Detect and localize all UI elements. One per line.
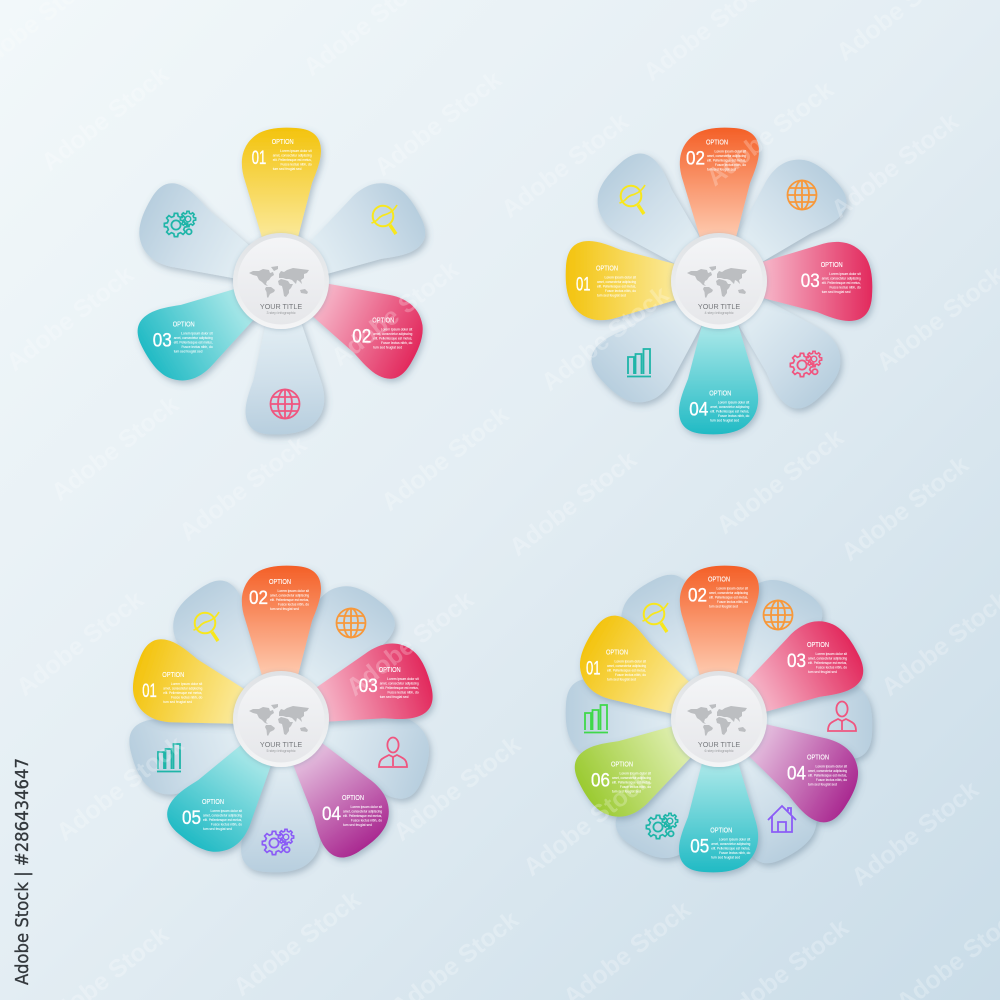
petal: search (grey) <box>583 144 719 280</box>
text: option 03: tum sed feugiat sed <box>822 290 851 294</box>
text: option 02: Lorem ipsum dolor sit <box>381 328 412 332</box>
text: option 01: Lorem ipsum dolor sit <box>171 682 202 686</box>
text: option 02: OPTION <box>372 318 394 325</box>
text: option 03: tum sed feugiat sed <box>808 670 837 674</box>
text: option 03 <box>359 667 419 699</box>
center circle <box>671 233 767 329</box>
petal: search (grey) <box>296 170 434 296</box>
text: option 04: 04 <box>322 803 341 825</box>
text: option 02 <box>249 579 309 611</box>
icon: gears <box>164 211 196 237</box>
text: option 04: amet, consectetur adipiscing <box>808 769 847 773</box>
text: option 01: elit. Pellentesque est metus, <box>597 285 636 289</box>
text: option 03: elit. Pellentesque est metus, <box>808 661 847 665</box>
text: option 05: elit. Pellentesque est metus, <box>203 818 242 822</box>
center circle: 6 step infographic <box>704 749 734 753</box>
text: option 01: Lorem ipsum dolor sit <box>280 149 312 153</box>
petal: house (grey) <box>704 734 830 872</box>
text: option 03: elit. Pellentesque est metus, <box>380 686 419 690</box>
text: option 04: Fusce lectus nibh, do <box>351 818 382 822</box>
petal: chart (grey) <box>566 679 679 758</box>
petal: globe (grey) <box>242 320 325 436</box>
text: option 04: tum sed feugiat sed <box>808 783 837 787</box>
text: option 03: OPTION <box>379 667 401 674</box>
text: option 01: Fusce lectus nibh, do <box>605 289 636 293</box>
text: option 01: 01 <box>586 657 600 679</box>
petal: globe (grey) <box>705 567 830 704</box>
watermark pattern: Adobe Stock <box>846 776 984 892</box>
center circle: 5 step infographic <box>266 749 296 753</box>
text: option 01: tum sed feugiat sed <box>597 294 626 298</box>
text: option 04: amet, consectetur adipiscing <box>343 810 382 814</box>
text: option 03: OPTION <box>173 322 195 329</box>
text: option 03: 03 <box>787 650 806 672</box>
center circle: 4 step infographic <box>704 311 734 315</box>
text: option 02: elit. Pellentesque est metus, <box>709 595 748 599</box>
text: option 03: Lorem ipsum dolor sit <box>829 272 861 276</box>
text: option 05: OPTION <box>202 799 224 806</box>
petal: option 01 <box>566 241 679 320</box>
text: option 04: Lorem ipsum dolor sit <box>815 765 847 769</box>
text: option 01 <box>586 649 646 681</box>
text: option 03: Fusce lectus nibh, do <box>182 345 213 349</box>
text: option 02: amet, consectetur adipiscing <box>709 591 748 595</box>
petal: option 02 <box>680 128 759 241</box>
text: option 02: amet, consectetur adipiscing <box>707 154 746 158</box>
text: option 03 <box>153 322 213 354</box>
icon: bar chart <box>584 705 608 732</box>
text: option 01: Lorem ipsum dolor sit <box>614 659 646 663</box>
text: option 04: OPTION <box>709 391 731 398</box>
petal: option 03 <box>759 242 872 321</box>
text: option 01: elit. Pellentesque est metus, <box>163 691 202 695</box>
petal: person (grey) <box>307 694 439 804</box>
watermark pattern: Adobe Stock <box>341 586 479 702</box>
text: option 05: tum sed feugiat sed <box>711 855 740 859</box>
watermark pattern: Adobe Stock <box>701 76 839 192</box>
icon: person <box>828 702 856 731</box>
text: option 03: amet, consectetur adipiscing <box>174 336 213 340</box>
watermark pattern: Adobe Stock <box>11 586 149 702</box>
text: option 01: amet, consectetur adipiscing <box>607 664 646 668</box>
text: option 02: 02 <box>686 147 705 169</box>
petal: search (grey) <box>608 566 734 704</box>
text: option 02: amet, consectetur adipiscing <box>270 594 309 598</box>
watermark pattern: Adobe Stock <box>1 261 139 377</box>
text: option 06: tum sed feugiat sed <box>612 790 641 794</box>
text: option 02: elit. Pellentesque est metus, <box>270 598 309 602</box>
text: option 01: tum sed feugiat sed <box>163 700 192 704</box>
text: option 02: elit. Pellentesque est metus, <box>707 158 746 162</box>
petal: option 02 <box>242 566 321 679</box>
text: option 03 <box>801 262 861 294</box>
text: option 02: Lorem ipsum dolor sit <box>714 149 746 153</box>
icon: house <box>768 806 796 832</box>
watermark pattern: Adobe Stock <box>174 431 312 547</box>
text: option 01: OPTION <box>162 672 184 679</box>
text: option 03: elit. Pellentesque est metus, <box>822 281 861 285</box>
center circle: YOUR TITLE <box>698 740 740 749</box>
text: option 06: Fusce lectus nibh, do <box>620 785 651 789</box>
text: option 05: Lorem ipsum dolor sit <box>210 809 242 813</box>
text: option 01: Fusce lectus nibh, do <box>615 673 646 677</box>
text: option 04: OPTION <box>342 795 364 802</box>
petal: option 01 <box>567 608 704 733</box>
text: option 05: amet, consectetur adipiscing <box>711 842 750 846</box>
text: option 05: Fusce lectus nibh, do <box>719 851 750 855</box>
text: option 02: tum sed feugiat sed <box>709 604 738 608</box>
text: option 03: Fusce lectus nibh, do <box>830 286 861 290</box>
watermark pattern: Adobe Stock <box>518 766 656 882</box>
center circle <box>233 671 329 767</box>
icon: search <box>642 603 668 632</box>
icon: search <box>620 185 645 214</box>
text: option 06: 06 <box>591 770 610 792</box>
petal: option 06 <box>566 704 704 830</box>
text: option 02: OPTION <box>708 576 730 583</box>
icon: gears <box>790 351 822 377</box>
center circle <box>233 233 329 329</box>
text: option 02: 02 <box>352 326 371 348</box>
text: option 01: elit. Pellentesque est metus, <box>607 668 646 672</box>
petal: chart (grey) <box>123 693 255 804</box>
watermark pattern: Adobe Stock <box>388 731 526 847</box>
text: option 02: Lorem ipsum dolor sit <box>716 586 748 590</box>
icon: bar chart <box>157 744 181 772</box>
watermark pattern: Adobe Stock <box>711 424 849 540</box>
text: option 04: elit. Pellentesque est metus, <box>808 774 847 778</box>
text: option 03: 03 <box>359 675 378 697</box>
petal: option 04 <box>272 728 403 867</box>
text: option 03: 03 <box>153 330 172 352</box>
text: option 03: OPTION <box>807 642 829 649</box>
center circle: YOUR TITLE <box>260 740 302 749</box>
text: option 01 <box>576 266 636 298</box>
text: option 01: tum sed feugiat sed <box>273 167 302 171</box>
petal: person (grey) <box>759 680 872 759</box>
text: option 02 <box>352 318 412 350</box>
text: option 03: amet, consectetur adipiscing <box>380 682 419 686</box>
petal: globe (grey) <box>720 145 856 281</box>
text: option 02: tum sed feugiat sed <box>707 167 736 171</box>
text: option 06 <box>591 762 651 794</box>
text: option 03: Fusce lectus nibh, do <box>388 690 419 694</box>
petal: option 01 <box>242 128 321 241</box>
text: option 03: OPTION <box>821 262 843 269</box>
text: option 05: amet, consectetur adipiscing <box>203 814 242 818</box>
text: option 03: Lorem ipsum dolor sit <box>815 652 847 656</box>
petal: option 03 <box>307 634 439 745</box>
text: option 04 <box>322 795 382 827</box>
text: option 05: Lorem ipsum dolor sit <box>719 837 750 841</box>
text: option 02: tum sed feugiat sed <box>373 346 402 350</box>
text: option 05 <box>182 799 242 831</box>
watermark pattern: Adobe Stock <box>46 391 184 507</box>
text: option 02: Fusce lectus nibh, do <box>717 600 748 604</box>
text: option 03: Fusce lectus nibh, do <box>816 666 847 670</box>
text: option 02: amet, consectetur adipiscing <box>373 332 412 336</box>
text: option 01: 01 <box>252 147 266 169</box>
text: option 03: amet, consectetur adipiscing <box>822 276 861 280</box>
text: option 01: OPTION <box>606 649 628 656</box>
watermark pattern: Adobe Stock <box>51 731 189 847</box>
petal: gears (grey) <box>608 734 733 871</box>
text: option 02 <box>688 576 748 608</box>
text: option 01: Fusce lectus nibh, do <box>281 162 312 166</box>
text: option 05: 05 <box>690 835 709 857</box>
petal: option 03 <box>129 267 267 394</box>
petal: option 04 <box>734 705 871 830</box>
text: option 02: 02 <box>249 587 268 609</box>
text: option 03: Lorem ipsum dolor sit <box>181 332 213 336</box>
text: option 03: elit. Pellentesque est metus, <box>174 341 213 345</box>
icon: person <box>379 738 407 767</box>
text: option 05: elit. Pellentesque est metus, <box>711 846 750 850</box>
text: option 04 <box>787 755 847 787</box>
diagram: 5 step flower <box>123 566 439 872</box>
text: option 04: 04 <box>689 399 708 421</box>
watermark pattern: Adobe Stock <box>376 401 514 517</box>
center circle: YOUR TITLE <box>260 302 302 311</box>
petal: option 05 <box>159 728 289 866</box>
watermark pattern: Adobe Stock <box>369 66 507 182</box>
petal: option 04 <box>679 321 758 434</box>
text: option 01 <box>142 672 202 704</box>
icon: gears <box>646 813 678 839</box>
text: option 06: amet, consectetur adipiscing <box>612 776 651 780</box>
text: option 04 <box>689 391 749 423</box>
center circle <box>671 671 767 767</box>
text: option 03: tum sed feugiat sed <box>174 350 203 354</box>
text: option 05 <box>690 827 750 859</box>
text: option 02: Fusce lectus nibh, do <box>278 602 309 606</box>
text: option 06: OPTION <box>611 762 633 769</box>
text: option 04: 04 <box>787 763 806 785</box>
text: option 01: amet, consectetur adipiscing <box>163 686 202 690</box>
diagram: 6 step flower <box>566 566 872 872</box>
center circle: YOUR TITLE <box>698 302 740 311</box>
icon: search <box>194 612 219 641</box>
text: option 02: OPTION <box>269 579 291 586</box>
petal: gears (grey) <box>719 282 855 418</box>
text: option 01: 01 <box>142 680 157 702</box>
stock id label: Adobe Stock | #286434647 <box>13 758 33 985</box>
watermark pattern: Adobe Stock <box>504 446 642 562</box>
center circle: 3 step infographic <box>266 311 296 315</box>
text: option 02: 02 <box>688 584 707 606</box>
watermark pattern: Adobe Stock <box>36 61 174 177</box>
icon: globe <box>788 180 816 210</box>
text: option 05: 05 <box>182 807 201 829</box>
text: option 02: Fusce lectus nibh, do <box>715 163 746 167</box>
petal: option 02 <box>680 566 759 679</box>
petal: chart (grey) <box>582 281 718 417</box>
text: option 01: amet, consectetur adipiscing <box>273 154 312 158</box>
text: option 03: amet, consectetur adipiscing <box>808 656 847 660</box>
icon: bar chart <box>627 349 651 376</box>
text: option 04: tum sed feugiat sed <box>710 419 739 423</box>
icon: gears <box>262 829 294 855</box>
text: option 02 <box>686 139 746 171</box>
text: option 02: Lorem ipsum dolor sit <box>277 589 309 593</box>
text: option 01 <box>252 139 312 171</box>
diagram: 3 step flower <box>127 128 435 436</box>
watermark pattern: Adobe Stock <box>826 108 964 224</box>
text: option 02: OPTION <box>706 139 728 146</box>
petal: option 05 <box>679 759 758 872</box>
text: option 05: OPTION <box>710 827 732 834</box>
diagram: 4 step flower <box>566 128 872 434</box>
text: option 04: elit. Pellentesque est metus, <box>710 410 749 414</box>
text: option 02: tum sed feugiat sed <box>270 607 299 611</box>
icon: globe <box>270 390 300 418</box>
petal: option 01 <box>123 634 255 744</box>
petal: globe (grey) <box>273 572 403 710</box>
text: option 02: Fusce lectus nibh, do <box>381 341 412 345</box>
text: option 01: 01 <box>576 274 590 296</box>
text: option 01: OPTION <box>596 266 618 273</box>
text: option 03: Lorem ipsum dolor sit <box>387 677 419 681</box>
watermark pattern: Adobe Stock <box>536 281 674 397</box>
text: option 05: tum sed feugiat sed <box>203 827 232 831</box>
watermark pattern: Adobe Stock <box>326 256 464 372</box>
text: option 03: 03 <box>801 270 820 292</box>
text: option 03 <box>787 642 847 674</box>
text: option 01: amet, consectetur adipiscing <box>597 280 636 284</box>
petal: gears (grey) <box>241 759 320 872</box>
watermark pattern: Adobe Stock <box>496 108 634 224</box>
text: option 04: elit. Pellentesque est metus, <box>343 814 382 818</box>
text: option 06: elit. Pellentesque est metus, <box>612 781 651 785</box>
watermark pattern: Adobe Stock <box>836 451 974 567</box>
icon: search <box>372 205 397 234</box>
text: option 01: Fusce lectus nibh, do <box>171 696 202 700</box>
text: option 04: tum sed feugiat sed <box>343 823 372 827</box>
text: option 04: amet, consectetur adipiscing <box>710 405 749 409</box>
text: option 05: Fusce lectus nibh, do <box>211 822 242 826</box>
text: option 02: elit. Pellentesque est metus, <box>373 337 412 341</box>
petal: search (grey) <box>159 571 290 710</box>
petal: option 03 <box>734 608 872 734</box>
text: option 04: OPTION <box>807 755 829 762</box>
text: option 06: Lorem ipsum dolor sit <box>619 772 651 776</box>
text: option 03: tum sed feugiat sed <box>380 695 409 699</box>
watermark pattern: Adobe Stock <box>228 886 366 1000</box>
text: option 01: OPTION <box>272 139 294 146</box>
text: option 04: Lorem ipsum dolor sit <box>350 805 382 809</box>
petal: gear (grey) <box>127 176 264 298</box>
text: option 01: tum sed feugiat sed <box>607 677 636 681</box>
icon: globe <box>336 608 366 638</box>
text: option 04: Fusce lectus nibh, do <box>816 778 847 782</box>
text: option 01: elit. Pellentesque est metus, <box>273 158 312 162</box>
petal: option 02 <box>298 264 435 386</box>
text: option 04: Lorem ipsum dolor sit <box>718 401 749 405</box>
text: option 01: Lorem ipsum dolor sit <box>604 276 636 280</box>
icon: globe <box>764 600 792 630</box>
text: option 04: Fusce lectus nibh, do <box>718 414 749 418</box>
